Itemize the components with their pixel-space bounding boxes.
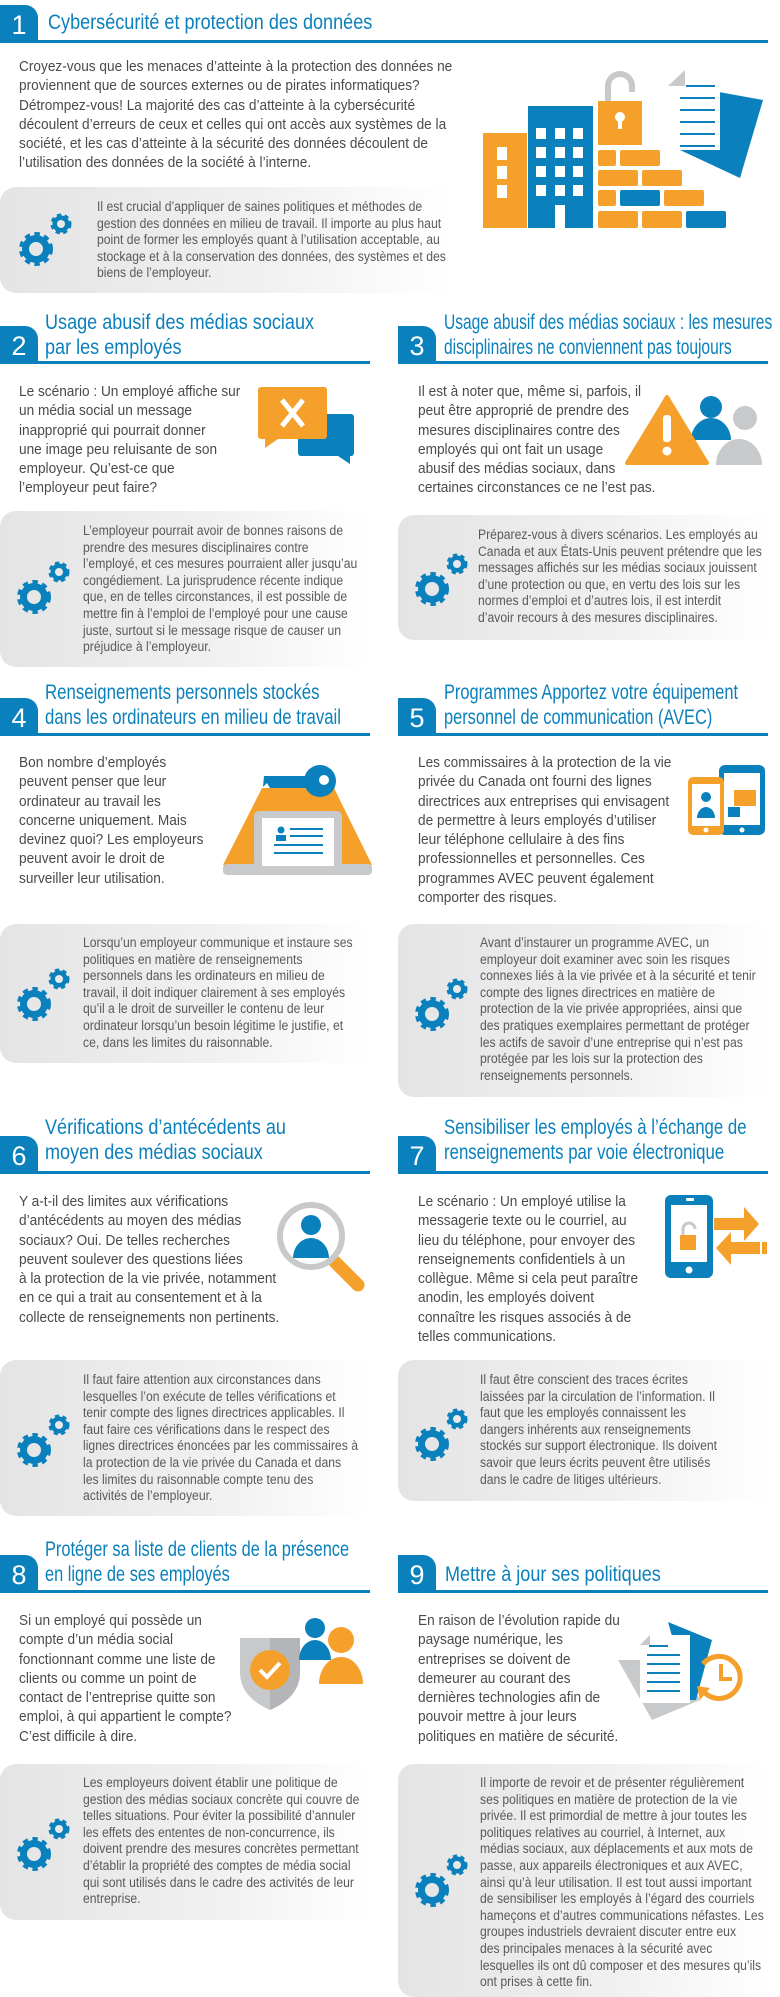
callout box 4: politiques en matière de renseignements bbox=[83, 952, 302, 967]
callout box 2: congédiement. La jurisprudence récente indique bbox=[83, 573, 343, 588]
text 7: collègue. Même si cela peut paraître bbox=[418, 1270, 638, 1287]
text 6: sociaux? Oui. De telles recherches bbox=[19, 1232, 230, 1249]
icon: gears bbox=[415, 978, 468, 1031]
header 4: 4 bbox=[11, 703, 27, 733]
text 5: Les commissaires à la protection de la vie bbox=[418, 754, 671, 771]
text 5: directrices aux entreprises qui envisagent bbox=[418, 793, 669, 810]
text 8: C’est difficile à dire. bbox=[19, 1728, 137, 1745]
header 6 bbox=[0, 1116, 370, 1174]
callout box 9: politiques relatives au courriel, à Internet, aux bbox=[480, 1825, 725, 1840]
callout box 7: laissées par la circulation de l’information. Il bbox=[480, 1389, 715, 1404]
text 2 bbox=[19, 383, 240, 496]
callout box 4: ordinateur lorsqu’un besoin légitime le justifie, et bbox=[83, 1018, 343, 1033]
header 7: 7 bbox=[409, 1141, 425, 1171]
icon: magnifier bbox=[277, 1202, 364, 1292]
header 1: Cybersécurité et protection des données bbox=[48, 11, 372, 34]
icon: gears bbox=[17, 968, 70, 1021]
callout box 7: savoir que leurs écrits peuvent être utilisés bbox=[480, 1455, 710, 1470]
intro text 1 bbox=[19, 58, 452, 171]
text 9: politiques en matière de sécurité. bbox=[418, 1728, 618, 1745]
text 9: entreprises se doivent de bbox=[418, 1651, 571, 1668]
text: Usage abusif des médias sociaux : les mesures bbox=[444, 311, 772, 334]
callout box 1: biens de l’employeur. bbox=[97, 265, 211, 280]
text 4: peuvent penser que leur bbox=[19, 773, 166, 790]
header 8: en ligne de ses employés bbox=[45, 1563, 230, 1586]
text 7: anodin, les employés doivent bbox=[418, 1289, 594, 1306]
callout box 5 bbox=[398, 924, 768, 1097]
callout box 8 bbox=[0, 1764, 368, 1920]
callout box 9: ses politiques en matière de protection de la vie bbox=[480, 1792, 737, 1807]
text 3: certaines circonstances ce ne l’est pas. bbox=[418, 479, 655, 496]
text 8: Si un employé qui possède un bbox=[19, 1612, 202, 1629]
callout box 7: stockés sur support électronique. Ils doivent bbox=[480, 1438, 717, 1453]
text 6: Y a-t-il des limites aux vérifications bbox=[19, 1193, 228, 1210]
header 9: Mettre à jour ses politiques bbox=[445, 1563, 661, 1586]
callout box 8: telles situations. Pour éviter la possibilité d’annuler bbox=[83, 1808, 355, 1823]
text 4: Bon nombre d’employés bbox=[19, 754, 166, 771]
text 8: fonctionnant comme une liste de bbox=[19, 1651, 216, 1668]
header 4: dans les ordinateurs en milieu de travail bbox=[45, 706, 341, 729]
text 7: renseignements confidentiels à un bbox=[418, 1251, 625, 1268]
callout box 3 bbox=[398, 515, 768, 640]
callout box 4: travail, il doit indiquer clairement à ses employés bbox=[83, 985, 345, 1000]
text 2: un média social un message bbox=[19, 402, 192, 419]
text: Vérifications d’antécédents au bbox=[45, 1116, 286, 1139]
text 2: l’employeur peut faire? bbox=[19, 479, 157, 496]
icon: warning and people bbox=[625, 394, 762, 465]
callout box 3: Canada et aux États-Unis peuvent prétendre que les bbox=[478, 544, 762, 559]
header 2 bbox=[0, 311, 370, 364]
callout box 7: dans le cadre de litiges ultérieurs. bbox=[480, 1472, 662, 1487]
callout box 4: qu’il a le droit de surveiller le contenu de leur bbox=[83, 1001, 324, 1016]
icon: shield and people bbox=[240, 1618, 363, 1710]
icon: gears bbox=[415, 1408, 468, 1461]
callout box 9: privée. Il est primordial de mettre à jour toutes les bbox=[480, 1808, 747, 1823]
text 7: lieu du téléphone, pour envoyer des bbox=[418, 1232, 635, 1249]
text 7: telles communications. bbox=[418, 1328, 556, 1345]
callout box 9: passe, aux appareils électroniques et aux AVEC, bbox=[480, 1858, 743, 1873]
text 7 bbox=[418, 1193, 638, 1345]
callout box 6: Il faut faire attention aux circonstances dans bbox=[83, 1372, 321, 1387]
icon: gears bbox=[17, 1818, 70, 1871]
callout box 2: L’employeur pourrait avoir de bonnes raisons de bbox=[83, 523, 343, 538]
icon: phone with lock and arrows bbox=[665, 1195, 767, 1278]
callout box 5: compte des lignes directrices en matière de bbox=[480, 985, 715, 1000]
header 6: 6 bbox=[11, 1141, 27, 1171]
callout box 8: les effets des ententes de non-concurrence, ils bbox=[83, 1825, 335, 1840]
callout box 3: d’avoir recours à des mesures disciplinaires. bbox=[478, 610, 718, 625]
callout box 5: connexes liés à la vie privée et à la sécurité et tenir bbox=[480, 968, 756, 983]
header 7 bbox=[398, 1116, 768, 1174]
text 5: de permettre à leurs employés d’utiliser bbox=[418, 812, 656, 829]
header 3: disciplinaires ne conviennent pas toujours bbox=[444, 336, 732, 359]
text 8: contact de l’entreprise quitte son bbox=[19, 1689, 216, 1706]
header 1: 1 bbox=[11, 10, 27, 40]
callout box 8: gestion des médias sociaux concrète qui couvre de bbox=[83, 1792, 359, 1807]
text 4: surveiller leur utilisation. bbox=[19, 870, 165, 887]
text 5: programmes AVEC peuvent également bbox=[418, 870, 654, 887]
icon: gears bbox=[415, 1854, 468, 1907]
callout box 9: de sensibiliser les employés à l’égard des courriels bbox=[480, 1891, 754, 1906]
text 6: collecte de renseignements non pertinents. bbox=[19, 1309, 279, 1326]
callout box 6: les limites du raisonnable compte tenu des bbox=[83, 1472, 313, 1487]
callout box 5: protection de la vie privée appropriées, ainsi que bbox=[480, 1001, 742, 1016]
icon: gears bbox=[17, 1414, 70, 1467]
header 9 bbox=[398, 1555, 768, 1593]
callout box 2: prendre des mesures disciplinaires contre bbox=[83, 540, 309, 555]
callout box 9 bbox=[398, 1764, 768, 1997]
text: Renseignements personnels stockés bbox=[45, 681, 320, 704]
callout box 3: normes d’emploi et d’autres lois, il est interdit bbox=[478, 593, 721, 608]
callout box 2: juste, surtout si le message risque de causer un bbox=[83, 623, 341, 638]
callout box 6: faut faire ces vérifications dans le respect des bbox=[83, 1422, 330, 1437]
callout box 9: groupes industriels devraient discuter entre eux bbox=[480, 1924, 736, 1939]
callout box 6: la protection de la vie privée du Canada et dans bbox=[83, 1455, 341, 1470]
illustration: buildings lock document bbox=[483, 70, 763, 228]
intro text 1: proviennent que de sources externes ou de pirates informatiques? bbox=[19, 77, 420, 94]
text 7: messagerie texte ou le courriel, au bbox=[418, 1212, 627, 1229]
text: Sensibiliser les employés à l’échange de bbox=[444, 1116, 747, 1139]
text 4: ordinateur au travail les bbox=[19, 793, 161, 810]
text 7: connaître les risques associés à de bbox=[418, 1309, 631, 1326]
text 8: clients ou comme un point de bbox=[19, 1670, 197, 1687]
text 8: emploi, à qui appartient le compte? bbox=[19, 1708, 231, 1725]
text 9: pouvoir mettre à jour leurs bbox=[418, 1708, 577, 1725]
header 4 bbox=[0, 681, 370, 736]
callout box 9: des principales menaces à la sécurité avec bbox=[480, 1941, 712, 1956]
intro text 1: Croyez-vous que les menaces d’atteinte à la protection des données ne bbox=[19, 58, 452, 75]
icon: documents and clock bbox=[618, 1622, 743, 1720]
text 3: peut être approprié de prendre des bbox=[418, 402, 629, 419]
callout box 2: préjudice à l’employeur. bbox=[83, 639, 211, 654]
callout box 4: Lorsqu’un employeur communique et instaure ses bbox=[83, 935, 353, 950]
callout box 1: gestion des données en milieu de travail. Il importe au plus haut bbox=[97, 216, 441, 231]
header 9: 9 bbox=[409, 1560, 425, 1590]
text 6: à la protection de la vie privée, notamment bbox=[19, 1270, 276, 1287]
callout box 8: d’établir la propriété des comptes de média social bbox=[83, 1858, 351, 1873]
text 3: Il est à noter que, même si, parfois, il bbox=[418, 383, 641, 400]
callout box 8: entreprise. bbox=[83, 1891, 141, 1906]
callout box 5: protégée par les lois sur la protection des bbox=[480, 1051, 703, 1066]
callout box 9: lesquelles ils ont dû composer et des mesures qu’ils bbox=[480, 1958, 761, 1973]
callout box 4: personnels dans les ordinateurs en milieu de bbox=[83, 968, 325, 983]
callout box 1 bbox=[0, 187, 452, 293]
header 5 bbox=[398, 681, 768, 736]
callout box 6: activités de l’employeur. bbox=[83, 1488, 212, 1503]
text 9: paysage numérique, les bbox=[418, 1631, 563, 1648]
callout box 5: des pratiques exemplaires permettant de protéger bbox=[480, 1018, 750, 1033]
text 9: demeurer au courant des bbox=[418, 1670, 571, 1687]
callout box 3: messages affichés sur les médias sociaux jouissent bbox=[478, 560, 757, 575]
header 8 bbox=[0, 1538, 370, 1593]
text 6: d’antécédents au moyen des médias bbox=[19, 1212, 241, 1229]
callout box 2 bbox=[0, 511, 368, 667]
icon: key and computer bbox=[223, 765, 372, 875]
callout box 7: Il faut être conscient des traces écrites bbox=[480, 1372, 688, 1387]
text 2: une image peu reluisante de son bbox=[19, 441, 217, 458]
intro text 1: découlent d’erreurs de ceux et celles qui ont accès aux systèmes de la bbox=[19, 116, 446, 133]
callout box 8: doivent prendre des mesures concrètes permettant bbox=[83, 1841, 359, 1856]
icon: gears bbox=[19, 214, 72, 266]
icon: gears bbox=[415, 554, 468, 606]
callout box 6: lesquelles l’on exécute de telles vérifications et bbox=[83, 1389, 336, 1404]
header 8: 8 bbox=[11, 1560, 27, 1590]
text 9: En raison de l’évolution rapide du bbox=[418, 1612, 620, 1629]
callout box 2: l’employé, et ces mesures pourraient aller jusqu’au bbox=[83, 556, 357, 571]
header 5: 5 bbox=[409, 703, 425, 733]
text 5: professionnelles et personnelles. Ces bbox=[418, 850, 645, 867]
text 3: mesures disciplinaires contre des bbox=[418, 422, 620, 439]
text 9: dernières technologies afin de bbox=[418, 1689, 600, 1706]
text 4: peuvent avoir le droit de bbox=[19, 850, 165, 867]
text 9 bbox=[418, 1612, 620, 1745]
header 3: 3 bbox=[409, 331, 425, 361]
callout box 5: les actifs de savoir d’une entreprise qui n’est pas bbox=[480, 1035, 743, 1050]
callout box 7 bbox=[398, 1360, 768, 1501]
callout box 8: Les employeurs doivent établir une politique de bbox=[83, 1775, 338, 1790]
callout box 5: renseignements personnels. bbox=[480, 1068, 633, 1083]
callout box 6: tenir compte des lignes directrices applicables. Il bbox=[83, 1405, 344, 1420]
callout box 1: Il est crucial d’appliquer de saines politiques et méthodes de bbox=[97, 199, 422, 214]
header 1 bbox=[0, 5, 768, 43]
text 6 bbox=[19, 1193, 279, 1326]
text 4: concerne uniquement. Mais bbox=[19, 812, 187, 829]
text: Programmes Apportez votre équipement bbox=[444, 681, 738, 704]
callout box 3: Préparez-vous à divers scénarios. Les employés au bbox=[478, 527, 758, 542]
text 5: privée du Canada ont fourni des lignes bbox=[418, 773, 652, 790]
text 2: employeur. Qu’est-ce que bbox=[19, 460, 175, 477]
callout box 2: que, en de telles circonstances, il est possible de bbox=[83, 589, 347, 604]
text 5: comporter des risques. bbox=[418, 889, 557, 906]
callout box 4 bbox=[0, 924, 368, 1063]
text 3: employés qui ont fait un usage bbox=[418, 441, 603, 458]
text 4 bbox=[19, 754, 203, 887]
callout box 9: hameçons et d’autres communications néfastes. Les bbox=[480, 1908, 764, 1923]
intro text 1: société, et les cas d’atteinte à la sécurité des données découlent de bbox=[19, 135, 428, 152]
text: Protéger sa liste de clients de la présence bbox=[45, 1538, 349, 1561]
text 5: leur téléphone cellulaire à des fins bbox=[418, 831, 624, 848]
header 2: par les employés bbox=[45, 336, 182, 359]
header 7: renseignements par voie électronique bbox=[444, 1141, 724, 1164]
callout box 1: point de former les employés quant à l’utilisation acceptable, au bbox=[97, 232, 440, 247]
text 8 bbox=[19, 1612, 231, 1745]
header 2: 2 bbox=[11, 331, 27, 361]
icon: phones bbox=[688, 765, 765, 835]
text 7: Le scénario : Un employé utilise la bbox=[418, 1193, 626, 1210]
icon: gears bbox=[17, 562, 70, 614]
intro text 1: l’utilisation des données de la société à l’interne. bbox=[19, 154, 311, 171]
callout box 7: dangers inhérents aux renseignements bbox=[480, 1422, 691, 1437]
header 3 bbox=[398, 311, 772, 364]
callout box 5: Avant d’instaurer un programme AVEC, un bbox=[480, 935, 709, 950]
text 3: abusif des médias sociaux, dans bbox=[418, 460, 615, 477]
text 6: peuvent soulever des questions liées bbox=[19, 1251, 243, 1268]
text 8: compte d’un média social bbox=[19, 1631, 173, 1648]
text 3 bbox=[418, 383, 655, 496]
header 6: moyen des médias sociaux bbox=[45, 1141, 263, 1164]
text 5 bbox=[418, 754, 671, 906]
callout box 9: médias sociaux, aux déplacements et aux mots de bbox=[480, 1841, 753, 1856]
callout box 3: d’une protection ou que, en vertu des lois sur les bbox=[478, 577, 740, 592]
text 4: devinez quoi? Les employeurs bbox=[19, 831, 203, 848]
callout box 5: employeur doit examiner avec soin les risques bbox=[480, 952, 730, 967]
text 2: Le scénario : Un employé affiche sur bbox=[19, 383, 240, 400]
text 2: inapproprié qui pourrait donner bbox=[19, 422, 206, 439]
callout box 8: qui sont utilisés dans le cadre des activités de leur bbox=[83, 1875, 354, 1890]
callout box 4: ce, dans les limites du raisonnable. bbox=[83, 1035, 273, 1050]
callout box 6 bbox=[0, 1360, 368, 1516]
callout box 9: Il importe de revoir et de présenter régulièrement bbox=[480, 1775, 744, 1790]
callout box 9: ainsi qu’à leur utilisation. Il est tout aussi important bbox=[480, 1875, 752, 1890]
callout box 6: lignes directrices énoncées par les commissaires à bbox=[83, 1438, 358, 1453]
header 5: personnel de communication (AVEC) bbox=[444, 706, 712, 729]
text 6: en ce qui a trait au consentement et à la bbox=[19, 1289, 262, 1306]
callout box 9: ont prises à cette fin. bbox=[480, 1974, 592, 1989]
callout box 2: mettre fin à l’emploi de l’employé pour une cause bbox=[83, 606, 348, 621]
icon: chat bubbles bbox=[258, 387, 354, 464]
callout box 7: faut que les employés connaissent les bbox=[480, 1405, 686, 1420]
text: Usage abusif des médias sociaux bbox=[45, 311, 314, 334]
intro text 1: Détrompez-vous! La majorité des cas d’atteinte à la cybersécurité bbox=[19, 97, 415, 114]
callout box 1: stockage et à la conservation des données, des systèmes et des bbox=[97, 249, 446, 264]
